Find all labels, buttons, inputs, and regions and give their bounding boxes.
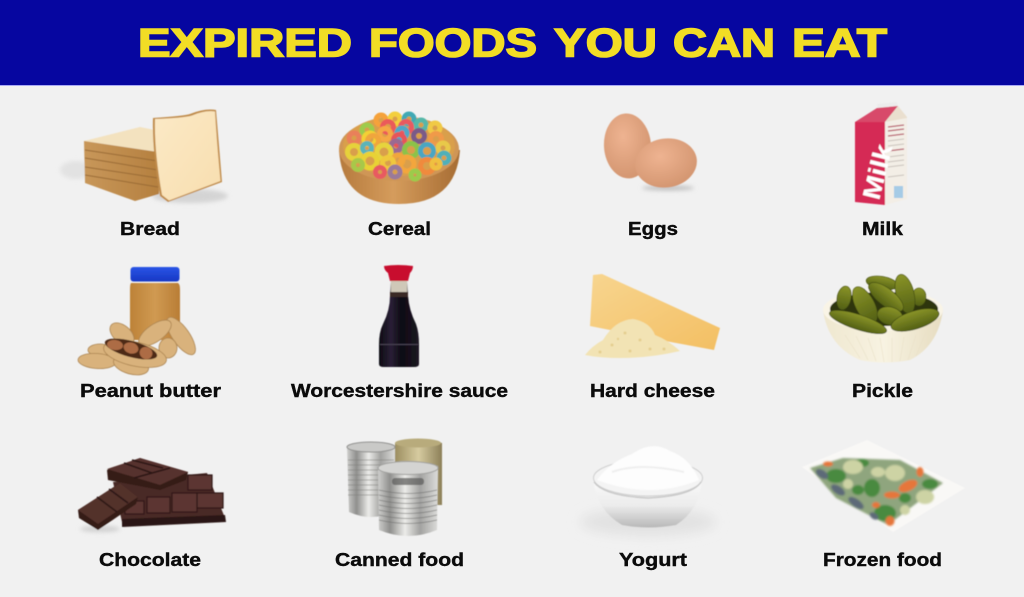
label: peanut butter: Peanut butter: [80, 381, 221, 401]
label: eggs: Eggs: [628, 219, 678, 239]
label: worcestershire sauce: Worcestershire sauce: [291, 381, 508, 401]
label: hard cheese: Hard cheese: [590, 381, 715, 401]
label: yogurt: Yogurt: [619, 550, 687, 570]
label: milk: Milk: [862, 219, 904, 239]
icon: cereal bowl: [339, 114, 460, 204]
label: frozen food: Frozen food: [823, 550, 942, 570]
title: EXPIRED: [138, 22, 352, 66]
icon: milk carton: [855, 102, 907, 205]
label: canned food: Canned food: [335, 550, 464, 570]
icon: canned food: [347, 438, 442, 536]
icon: pickle bowl: [823, 272, 943, 362]
icon: eggs: [602, 112, 700, 192]
title: YOU: [554, 22, 657, 66]
icon: chocolate: [78, 458, 226, 532]
title: [138, 22, 887, 66]
icon: sauce bottle: [379, 265, 419, 367]
icon: milk carton: Milk: [858, 141, 898, 202]
title: EAT: [792, 22, 887, 66]
label: cereal: Cereal: [368, 219, 431, 239]
label: chocolate: Chocolate: [99, 550, 201, 570]
icon: peanut butter: [78, 267, 201, 378]
icon: yogurt bowl: [580, 446, 716, 536]
icon: hard cheese: [585, 274, 720, 358]
header banner: [0, 0, 1024, 86]
title: FOODS: [369, 22, 537, 66]
label: bread: Bread: [120, 219, 180, 239]
icon: frozen food bag: [802, 440, 965, 532]
title: CAN: [673, 22, 775, 66]
icon: bread: [60, 110, 228, 203]
label: pickle: Pickle: [852, 381, 913, 401]
